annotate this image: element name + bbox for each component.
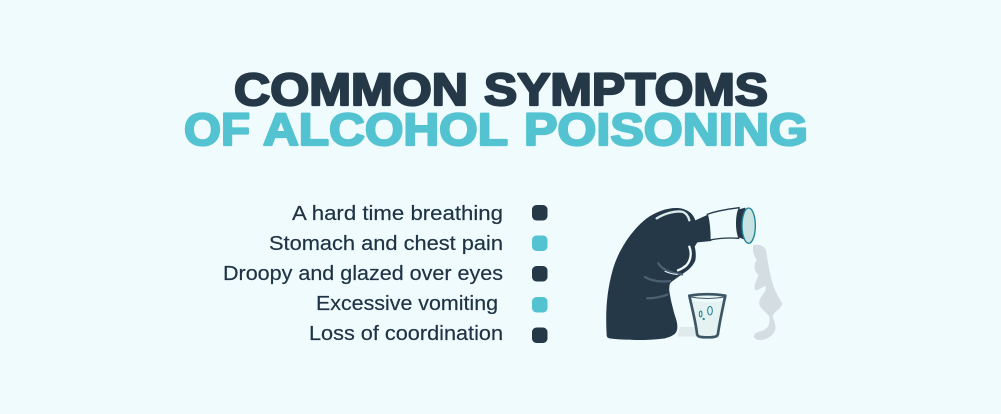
title line 1: COMMON xyxy=(234,64,468,115)
bubble large xyxy=(708,306,712,315)
neck fold xyxy=(658,263,682,274)
glass rim line xyxy=(691,297,724,298)
bullet 1 xyxy=(532,205,548,220)
vomit stream xyxy=(753,245,782,340)
bullet 2 xyxy=(532,236,548,251)
bubble small xyxy=(699,311,702,317)
symptom: stomach: Stomach and chest pain xyxy=(269,232,503,255)
glass xyxy=(689,294,725,337)
illustration: person vomiting into glass xyxy=(606,208,782,340)
symptom: breathing: A hard time breathing xyxy=(292,202,503,225)
body silhouette xyxy=(606,208,711,340)
title line 2: POISONING xyxy=(524,104,808,155)
bullet 3 xyxy=(532,266,548,282)
title line 2 xyxy=(184,104,808,155)
symptom list xyxy=(223,202,503,345)
bottle opening xyxy=(742,208,755,243)
symptom: vomiting: Excessive vomiting xyxy=(316,292,498,315)
floor shadow xyxy=(677,327,697,337)
title line 2: OF xyxy=(184,104,250,155)
bubbles xyxy=(699,306,712,320)
symptom: coordination: Loss of coordination xyxy=(309,322,503,345)
bullet 4 xyxy=(532,297,548,312)
head highlight xyxy=(657,211,689,220)
title line 1: SYMPTOMS xyxy=(484,64,768,115)
glass body xyxy=(689,294,725,337)
bottle collar xyxy=(736,208,745,240)
symptom: eyes: Droopy and glazed over eyes xyxy=(223,262,503,285)
bullet 5 xyxy=(532,328,548,343)
title line 1 xyxy=(234,64,768,115)
neck fold highlight xyxy=(665,271,677,274)
bullet markers xyxy=(532,205,548,343)
title xyxy=(184,64,808,155)
chest fold xyxy=(645,277,670,281)
bottle neck xyxy=(707,208,739,240)
title line 2: ALCOHOL xyxy=(263,104,508,155)
mouth highlight xyxy=(678,247,691,270)
glass liquid top xyxy=(691,297,723,302)
bubble dot xyxy=(703,318,704,320)
belly fold xyxy=(647,295,667,298)
